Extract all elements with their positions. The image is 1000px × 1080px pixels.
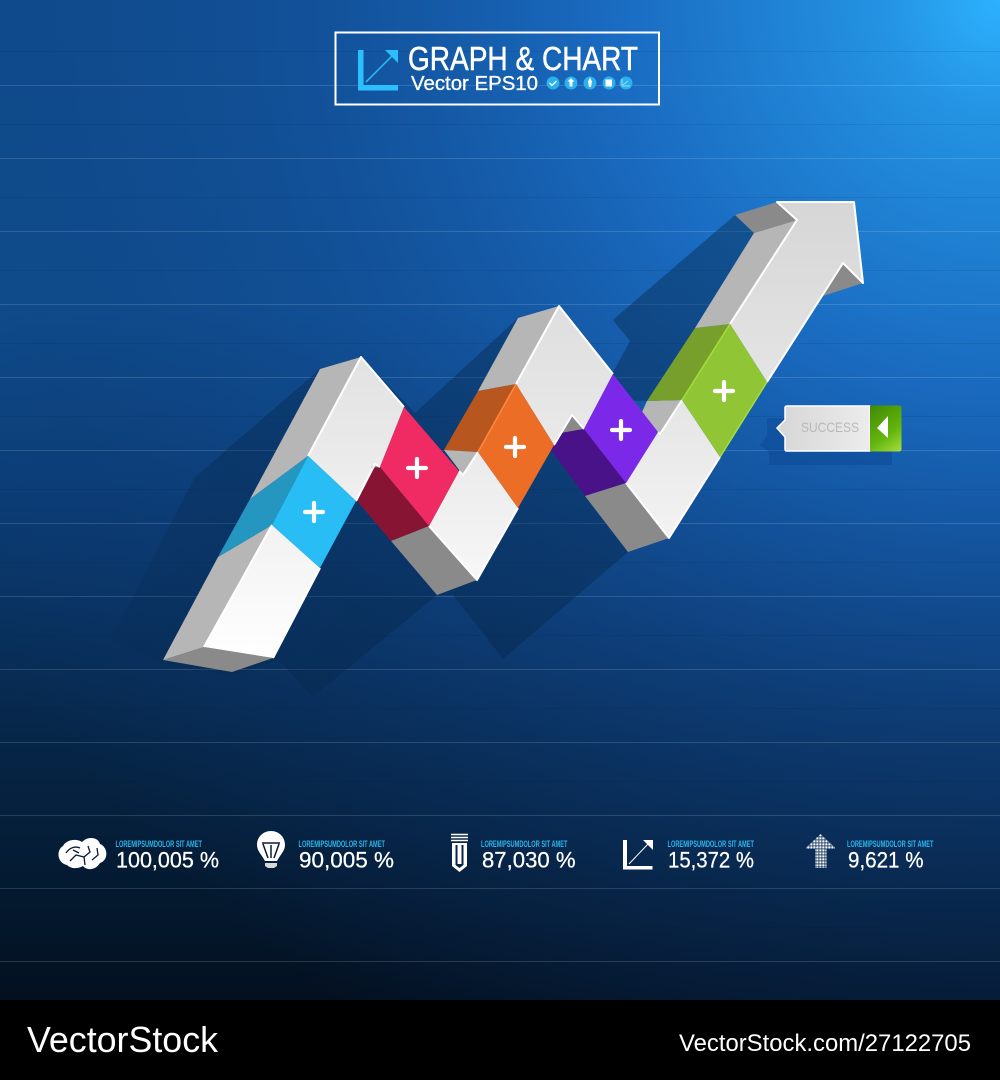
stat label: LOREMIPSUMDOLOR SIT AMET	[481, 839, 568, 849]
tag shadow	[760, 418, 892, 465]
tag triangle icon	[877, 416, 888, 438]
green band: side	[647, 324, 730, 401]
stat label: LOREMIPSUMDOLOR SIT AMET	[116, 839, 202, 849]
icon: dotted arrow	[806, 834, 835, 868]
stat value: 100,005 %	[116, 848, 219, 872]
stat value: 9,621 %	[848, 848, 924, 872]
small grey side under green	[642, 400, 682, 435]
stat: dotted arrow	[806, 834, 934, 872]
icon: chart arrow	[623, 840, 653, 870]
first segment: bottom end face	[163, 647, 273, 672]
blue band: side	[218, 456, 308, 557]
arrow head and shaft: front	[730, 202, 863, 382]
plus icon	[408, 459, 426, 477]
blue band	[272, 456, 356, 568]
stat: light bulb	[257, 831, 394, 872]
second segment: underside	[391, 526, 477, 595]
stat label: LOREMIPSUMDOLOR SIT AMET	[847, 839, 934, 849]
stat label: LOREMIPSUMDOLOR SIT AMET	[298, 839, 385, 849]
title icon: chart arrow	[358, 50, 398, 90]
green band	[682, 324, 767, 457]
plus icon	[506, 438, 524, 456]
tag label: SUCCESS	[801, 419, 859, 435]
arrow shaft: side	[695, 220, 797, 328]
stat value: 87,030 %	[482, 848, 576, 872]
first segment: front lower	[204, 525, 320, 658]
third segment: underside	[585, 483, 669, 552]
second segment: front	[429, 452, 518, 580]
small grey side under orange	[444, 450, 478, 475]
pink band	[380, 407, 459, 526]
white edge highlights	[204, 202, 863, 658]
footer url: VectorStock.com/27122705	[679, 1030, 971, 1057]
plus icon	[612, 421, 630, 439]
icon: brain	[58, 838, 106, 869]
title subheading: Vector EPS10	[411, 73, 538, 95]
long cast shadow of the chart	[110, 215, 754, 697]
first segment: front upper	[308, 357, 404, 501]
3D arrow chart	[163, 202, 863, 672]
plus icon	[305, 503, 323, 521]
stat label: LOREMIPSUMDOLOR SIT AMET	[668, 839, 754, 849]
orange band	[478, 384, 554, 508]
tag green cap	[870, 406, 902, 452]
title small circle icons	[546, 76, 632, 90]
icon: light bulb	[257, 831, 285, 868]
stat: chart	[623, 839, 754, 872]
tag body	[777, 406, 870, 451]
stat value: 90,005 %	[299, 848, 394, 872]
success tag	[760, 406, 902, 465]
purple band	[584, 374, 658, 483]
second peak: front	[516, 306, 613, 445]
plus icon	[715, 382, 733, 400]
arrow head: dark top	[735, 202, 797, 233]
stat: brain	[58, 838, 219, 872]
footer brand: VectorStock	[27, 1019, 219, 1060]
pink band: underside	[357, 467, 429, 541]
title box	[336, 32, 659, 104]
first segment: side lower	[163, 525, 272, 660]
notch under second peak	[561, 415, 584, 433]
stat: pencil	[451, 834, 576, 872]
footer bar	[0, 1000, 1000, 1080]
notch under first peak	[371, 463, 380, 468]
first segment: side upper	[250, 357, 361, 499]
orange band: side	[444, 384, 516, 452]
second peak: side	[478, 306, 559, 391]
title heading: GRAPH & CHART	[408, 40, 638, 77]
stat value: 15,372 %	[668, 848, 754, 872]
third segment: front	[626, 400, 720, 538]
arrow head: underside	[823, 263, 863, 296]
purple band: underside	[551, 429, 626, 496]
icon: pencil	[451, 834, 468, 872]
